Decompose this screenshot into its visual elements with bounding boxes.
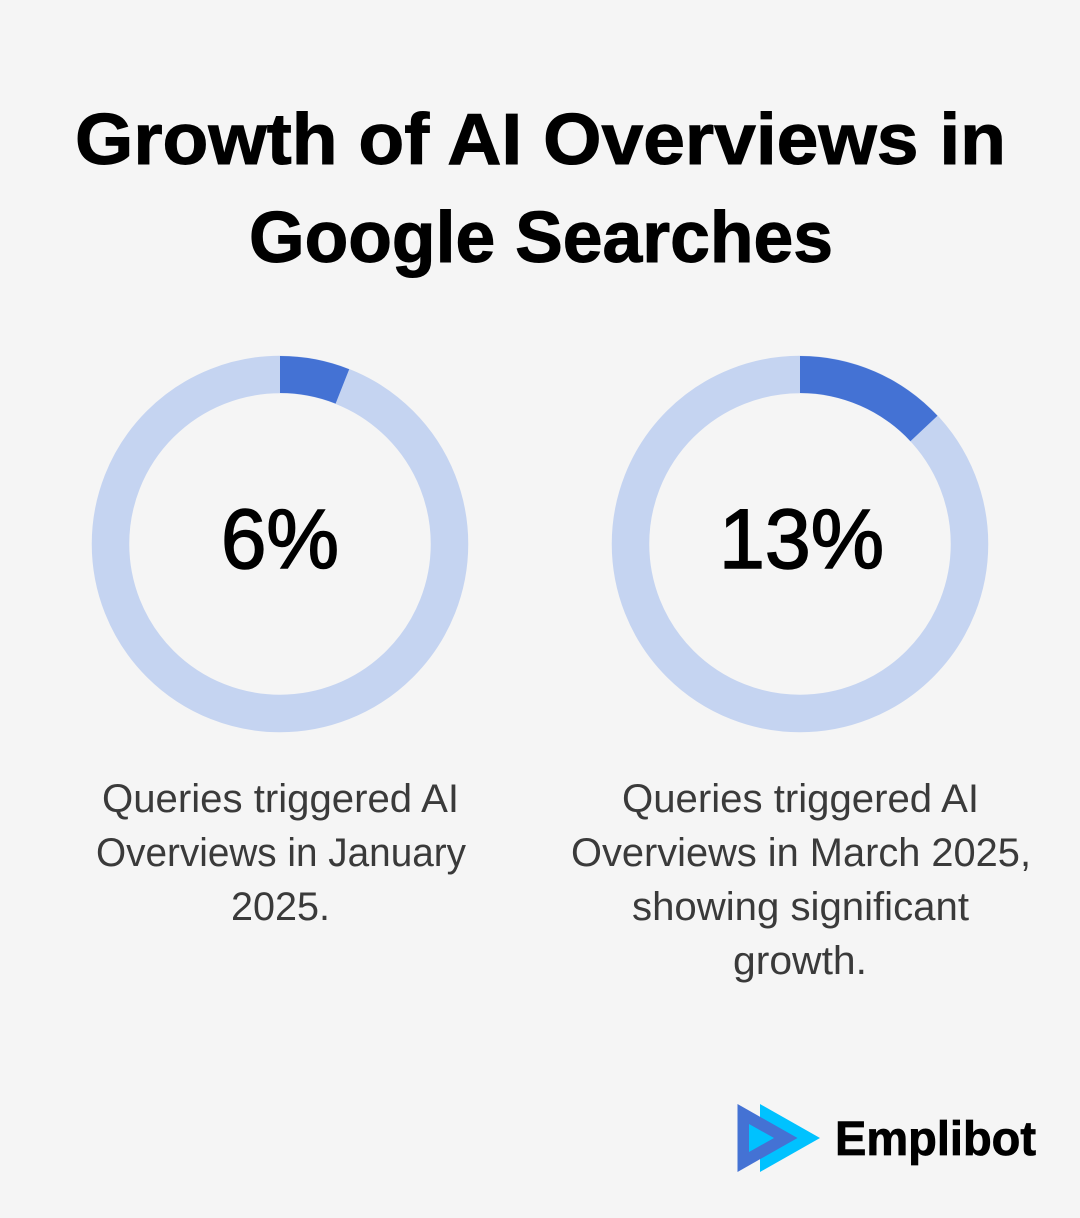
- description: January: Overviews in January: [96, 831, 466, 875]
- value: 6%: 6%: [221, 492, 339, 586]
- title: Google Searches: [249, 198, 833, 278]
- title: [75, 100, 1006, 278]
- donut chart: 13%: [630, 356, 970, 714]
- description: January: 2025.: [231, 885, 330, 929]
- description: March: growth.: [733, 939, 867, 983]
- description: March: Queries triggered AI: [622, 777, 979, 821]
- description: January: Queries triggered AI: [102, 777, 459, 821]
- description: January: [96, 777, 466, 929]
- description: March: showing significant: [632, 885, 969, 929]
- title: Growth of AI Overviews in: [75, 100, 1006, 180]
- logo: Emplibot: [738, 1104, 1036, 1172]
- panel: March 2025 statistic: [571, 356, 1031, 983]
- value: 13%: 13%: [719, 492, 884, 586]
- wordmark: Emplibot: [835, 1113, 1036, 1166]
- description: March: Overviews in March 2025,: [571, 831, 1031, 875]
- panel: January 2025 statistic: [96, 356, 466, 929]
- description: March: [571, 777, 1031, 983]
- donut chart: 6%: [110, 356, 450, 714]
- icon: play triangles: [738, 1104, 820, 1172]
